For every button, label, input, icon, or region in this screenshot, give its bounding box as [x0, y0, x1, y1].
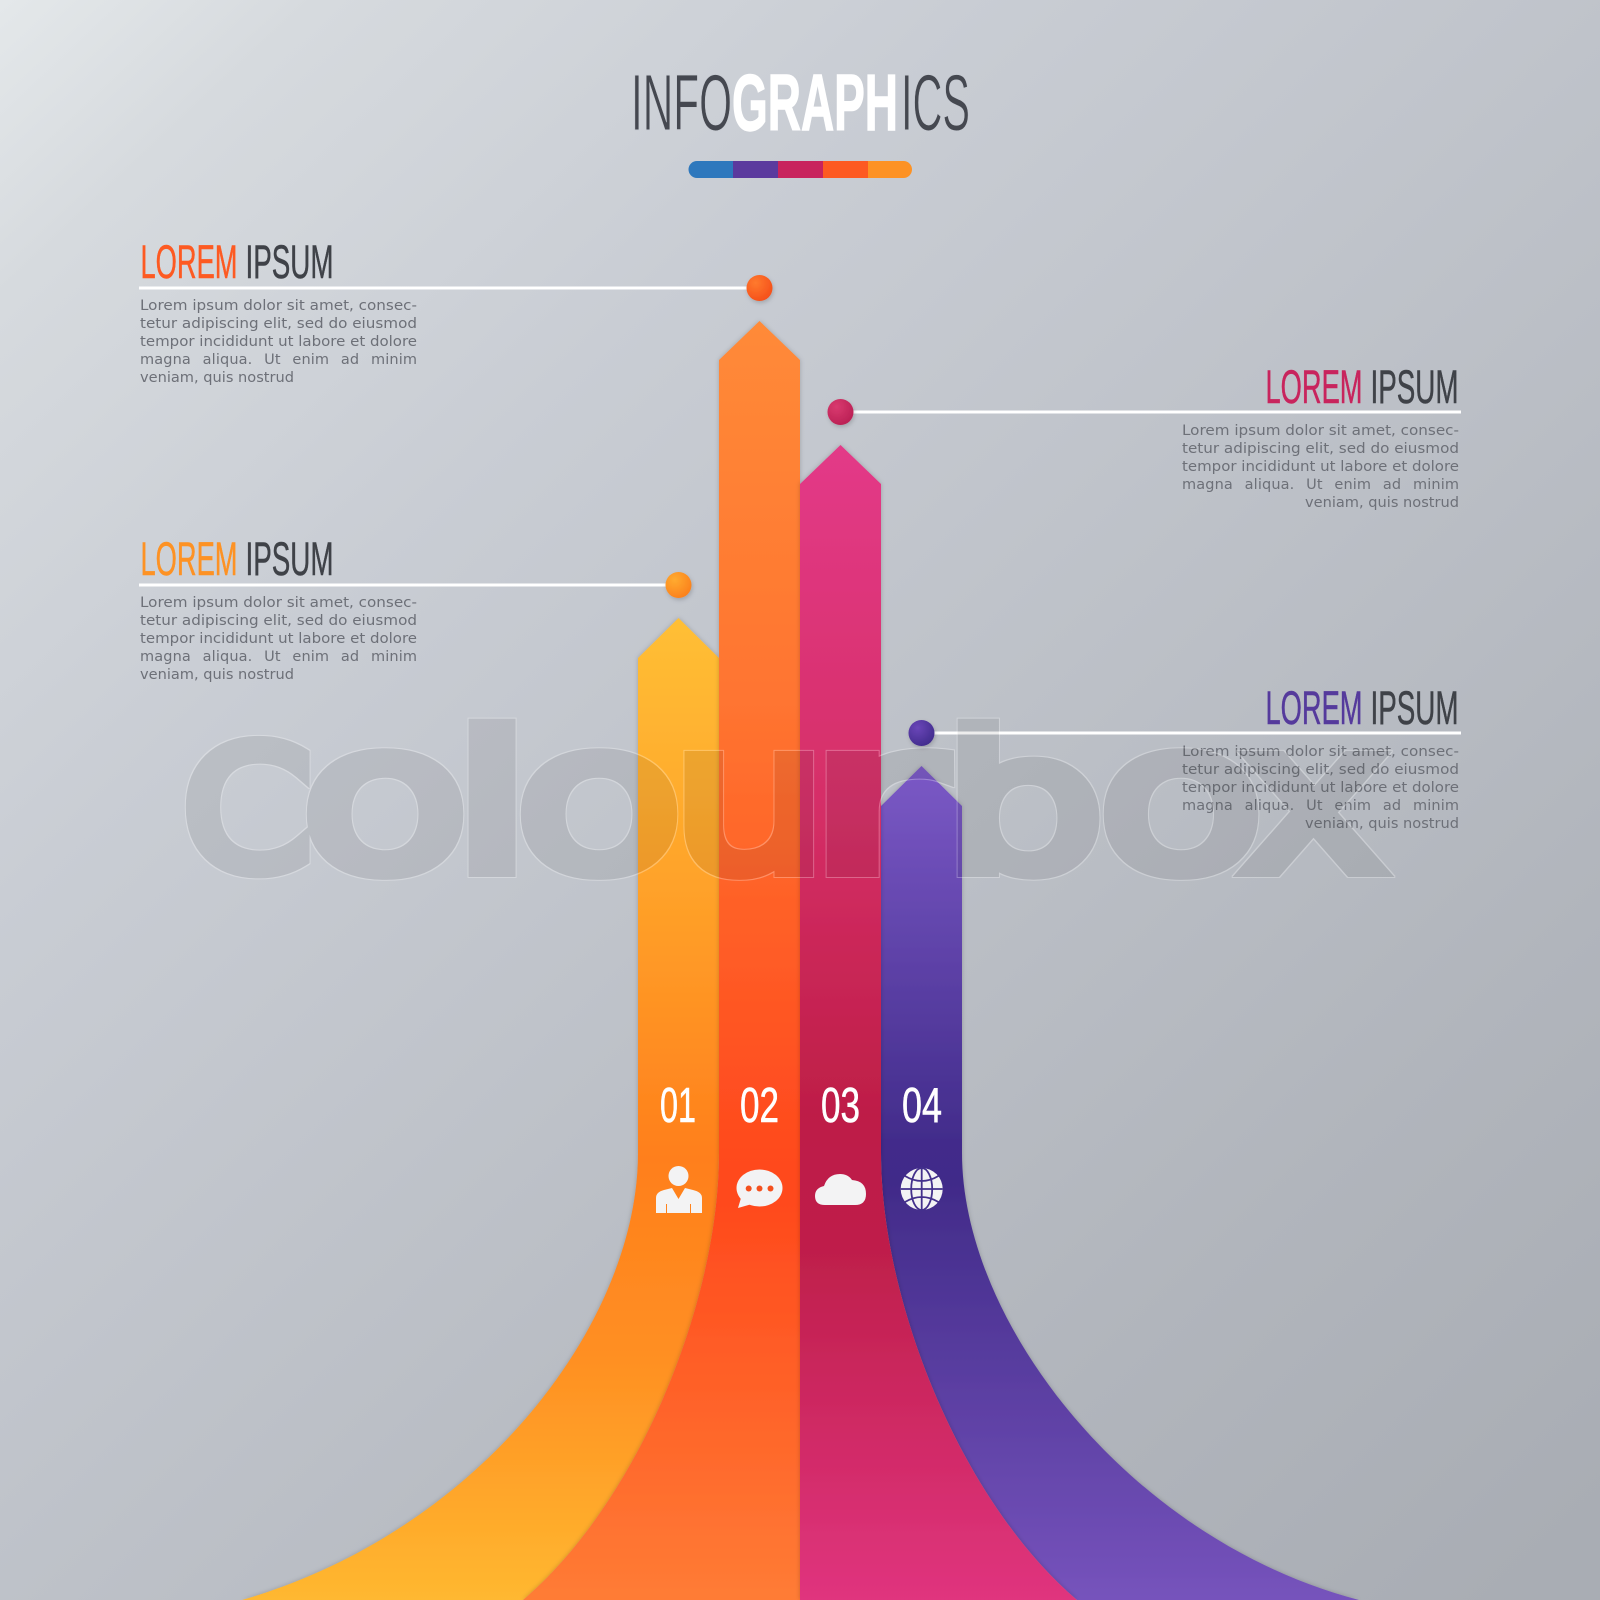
heading: IPSUM: [246, 235, 334, 288]
step numbers: 03: [821, 1079, 860, 1133]
body text: tetur adipiscing elit, sed do eiusmod: [140, 316, 417, 332]
body text: tetur adipiscing elit, sed do eiusmod: [1182, 441, 1459, 457]
step numbers: 02: [740, 1079, 779, 1133]
watermark: o: [1098, 681, 1264, 919]
heading: LOREM: [140, 532, 238, 585]
leader line: [853, 410, 1461, 414]
heading: IPSUM: [246, 532, 334, 585]
body text: Lorem ipsum dolor sit amet, consec-: [1182, 744, 1459, 760]
body text: [1182, 744, 1459, 832]
marker dot: [746, 275, 772, 301]
title: INFO: [631, 58, 732, 147]
heading: IPSUM: [1370, 681, 1458, 734]
panel: 04 callout, lower right: [908, 681, 1461, 832]
body text: [140, 298, 417, 386]
title colour bar: [688, 161, 912, 178]
step numbers: 01: [660, 1079, 696, 1133]
body text: magna aliqua. Ut enim ad minim: [1182, 477, 1459, 493]
watermark: b: [944, 694, 1104, 915]
watermark: C: [183, 712, 312, 910]
leader line: [934, 732, 1461, 734]
body text: tempor incididunt ut labore et dolore: [140, 631, 417, 647]
heading: IPSUM: [1370, 360, 1458, 413]
title: ICS: [901, 58, 970, 147]
icon: cloud: [815, 1174, 866, 1205]
body text: magna aliqua. Ut enim ad minim: [140, 649, 417, 665]
body text: [140, 595, 417, 683]
body text: tetur adipiscing elit, sed do eiusmod: [140, 613, 417, 629]
watermark: l: [452, 694, 532, 915]
heading: LOREM: [140, 235, 238, 288]
panel: 03 callout, upper right: [828, 360, 1461, 511]
arrow 04: purple: [881, 766, 1359, 1600]
body text: veniam, quis nostrud: [1305, 495, 1459, 511]
watermark: [183, 681, 1386, 919]
title: [631, 58, 970, 147]
body text: veniam, quis nostrud: [140, 370, 294, 386]
leader line: [139, 286, 749, 290]
step numbers: 04: [902, 1079, 942, 1133]
body text: magna aliqua. Ut enim ad minim: [1182, 798, 1459, 814]
icon: person: [656, 1166, 702, 1213]
title: GRAPH: [732, 58, 898, 147]
icon: speech bubble: [736, 1170, 782, 1208]
arrow 01: orange: [242, 618, 719, 1600]
watermark: x: [1242, 681, 1386, 919]
body text: Lorem ipsum dolor sit amet, consec-: [140, 298, 417, 314]
marker dot: [828, 399, 854, 425]
body text: Lorem ipsum dolor sit amet, consec-: [1182, 423, 1459, 439]
arrow 03: magenta: [800, 445, 1077, 1600]
body text: magna aliqua. Ut enim ad minim: [140, 352, 417, 368]
body text: tempor incididunt ut labore et dolore: [1182, 780, 1459, 796]
body text: veniam, quis nostrud: [1305, 816, 1459, 832]
leader line: [139, 584, 669, 586]
panel: 01 callout, lower left: [139, 532, 692, 683]
icon: globe: [901, 1168, 943, 1210]
watermark: o: [301, 681, 469, 919]
arrow 02: red orange: [523, 321, 800, 1600]
heading: LOREM: [1266, 360, 1362, 413]
body text: tempor incididunt ut labore et dolore: [140, 334, 417, 350]
body text: tetur adipiscing elit, sed do eiusmod: [1182, 762, 1459, 778]
marker dot: [908, 720, 934, 746]
watermark: o: [515, 681, 683, 919]
step numbers: [660, 1079, 942, 1133]
watermark: r: [808, 681, 944, 919]
watermark: u: [672, 681, 827, 919]
panel: 02 callout, top left: [139, 235, 772, 386]
marker dot: [666, 572, 692, 598]
body text: tempor incididunt ut labore et dolore: [1182, 459, 1459, 475]
heading: LOREM: [1266, 681, 1362, 734]
body text: [1182, 423, 1459, 511]
body text: veniam, quis nostrud: [140, 667, 294, 683]
body text: Lorem ipsum dolor sit amet, consec-: [140, 595, 417, 611]
